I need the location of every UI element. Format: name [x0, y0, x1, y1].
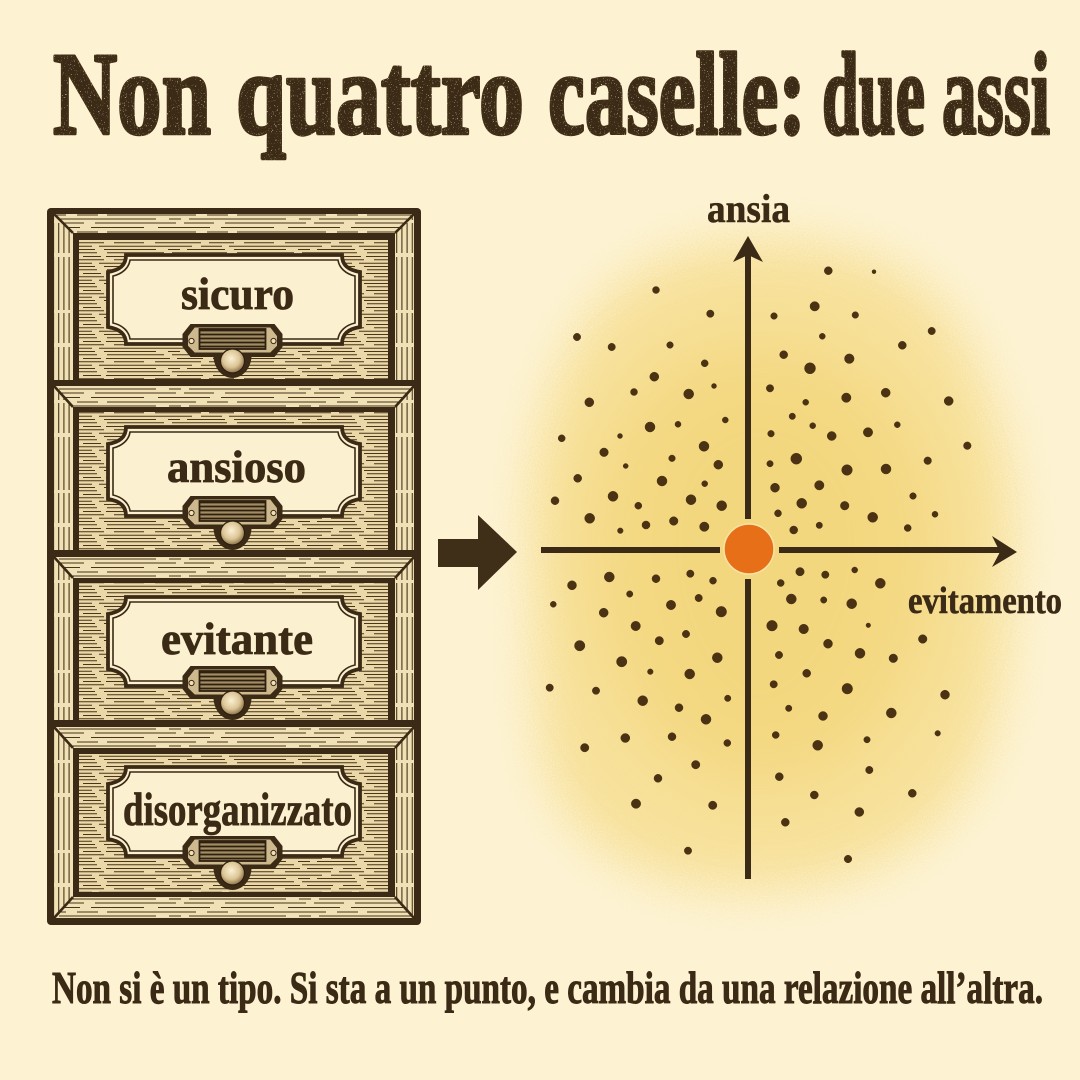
dots: upper-right quadrant [766, 267, 971, 534]
title: quattro [236, 28, 524, 160]
yellow scatter cloud [531, 240, 1013, 890]
drawer: evitante [54, 557, 414, 720]
drawer: sicuro: sicuro [181, 269, 294, 319]
dots: upper-left quadrant [551, 286, 728, 534]
title: Non [53, 28, 211, 160]
dot cloud [546, 267, 971, 863]
drawer: evitante: evitante [161, 614, 313, 664]
axis: evitamento (horizontal) [541, 536, 1017, 567]
drawer: disorganizzato [54, 727, 414, 918]
drawer: disorganizzato: disorganizzato [123, 784, 352, 836]
axis label: ansia: ansia [707, 186, 790, 231]
title [53, 28, 1050, 160]
dots: lower-left quadrant [546, 570, 731, 854]
title: caselle: [548, 28, 806, 160]
axis: ansia (vertical) [733, 236, 763, 879]
drawer: sicuro [54, 214, 414, 380]
drawer: ansioso: ansioso [167, 442, 306, 492]
filing cabinet [47, 208, 421, 925]
arrow: from drawers to axes [438, 515, 517, 590]
origin point [724, 524, 774, 574]
drawer: ansioso [54, 386, 414, 550]
title: due [822, 28, 925, 160]
dots: lower-right quadrant [767, 567, 950, 863]
